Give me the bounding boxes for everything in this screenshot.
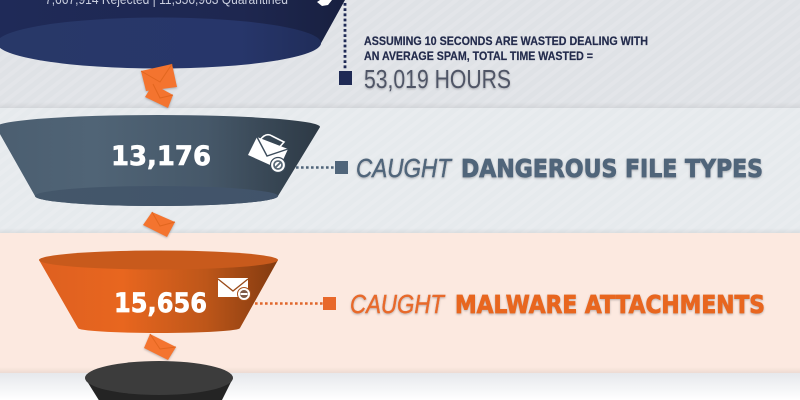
background band: white section: [0, 373, 800, 400]
text block: time wasted assumption: AN AVERAGE SPAM, TOTAL TIME WASTED =: [364, 51, 593, 63]
stat: 13,176: 13,176: [111, 141, 211, 172]
heading: caught dangerous file types: DANGEROUS FILE TYPES: [461, 154, 763, 183]
connector: dotted line to hours wasted: [339, 3, 352, 85]
funnel: navy spam funnel: [0, 0, 345, 68]
connector: dotted line to malware label: [255, 297, 336, 310]
icon: clipped envelope: [317, 0, 332, 6]
heading: caught malware attachments: CAUGHT: [350, 289, 446, 319]
stat: hours wasted: 53,019 HOURS: [364, 64, 511, 94]
background band: malware section: [0, 233, 800, 373]
funnel rim: navy: [0, 18, 321, 68]
heading: caught dangerous file types: [356, 153, 763, 183]
text block: time wasted assumption: [364, 36, 648, 63]
icon: two falling orange envelopes: [141, 64, 177, 108]
funnel: dark grey funnel: [85, 361, 233, 400]
background band: dangerous file types section: [0, 108, 800, 233]
background band: spam section: [0, 0, 800, 108]
text block: time wasted assumption: ASSUMING 10 SECONDS ARE WASTED DEALING WITH: [364, 36, 648, 48]
heading: caught dangerous file types: CAUGHT: [356, 153, 453, 183]
icon: falling orange envelope: [143, 212, 175, 237]
connector: dotted line to dangerous file types label: [296, 161, 348, 174]
heading: caught malware attachments: [350, 289, 765, 319]
funnel: slate dangerous file types funnel: [0, 115, 320, 206]
icon: envelope with block sign: [218, 278, 250, 300]
funnel: orange malware funnel: [39, 250, 278, 333]
funnel rim: slate bottom: [35, 186, 278, 206]
funnel rim: dark grey top: [85, 361, 233, 395]
icon: falling orange envelope: [144, 334, 176, 360]
icon: envelope with attachment and block sign: [248, 135, 288, 172]
stat: 15,656: 15,656: [114, 288, 207, 319]
funnel rim: orange top: [39, 250, 278, 270]
